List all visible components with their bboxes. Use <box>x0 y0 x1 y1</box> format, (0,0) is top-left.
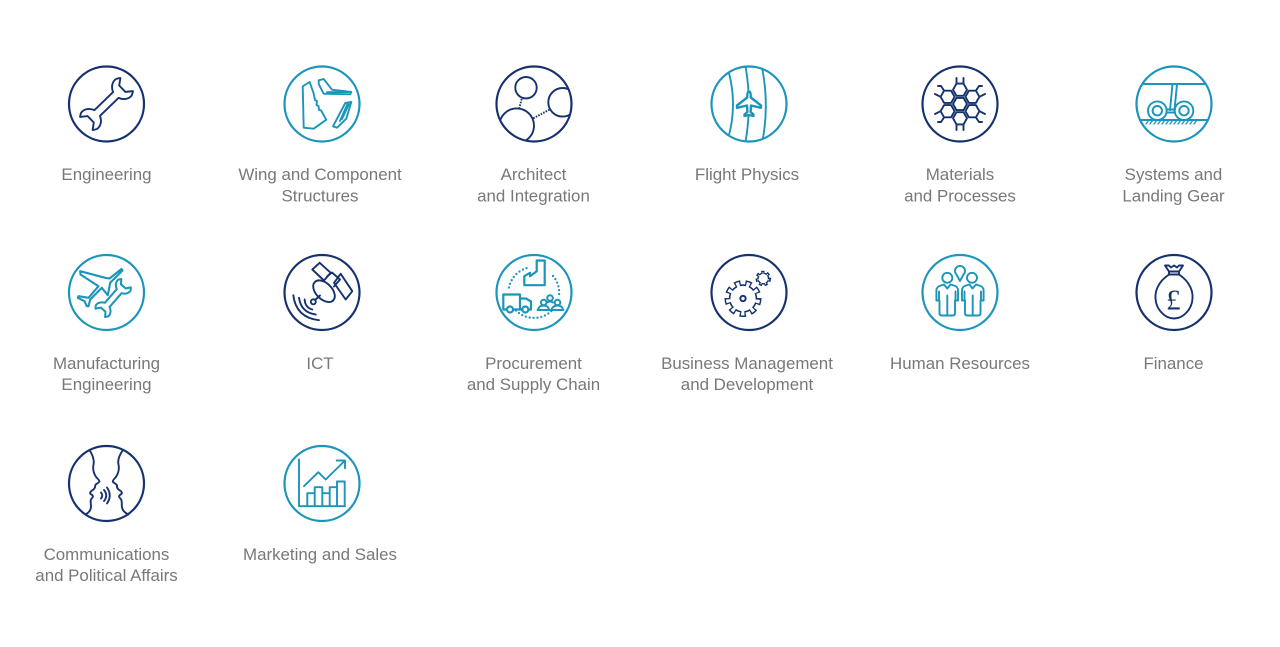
icon: people (Human Resources) <box>922 255 998 330</box>
icon: growth chart (Marketing and Sales) <box>284 446 360 521</box>
label: Procurement and Supply Chain: and Supply Chain <box>467 375 600 394</box>
label: Wing and Component Structures: Structures <box>282 186 358 206</box>
icon: factory, truck and people (Procurement and Supply Chain) <box>496 255 572 330</box>
label: Business Management and Development: and Development <box>681 375 813 394</box>
label: Business Management and Development: Business Management <box>661 354 833 373</box>
icon: two faces talking (Communications and Political Affairs) <box>69 446 144 521</box>
label: Engineering: Engineering <box>61 165 152 184</box>
label: Finance: Finance <box>1143 354 1204 373</box>
icon: wrench (Engineering) <box>69 66 144 142</box>
pound sign: £ <box>1166 284 1181 316</box>
label: Materials and Processes: and Processes <box>904 186 1016 206</box>
label: Procurement and Supply Chain: Procurement <box>485 354 582 373</box>
label: Communications and Political Affairs: Communications <box>44 545 169 564</box>
label: Marketing and Sales: Marketing and Sales <box>243 545 397 564</box>
label: Architect and Integration: and Integration <box>477 186 590 206</box>
icon grid <box>36 65 1224 581</box>
icon: landing gear (Systems and Landing Gear) <box>1136 66 1212 142</box>
icon: gears (Business Management and Development) <box>712 255 786 330</box>
label: Systems and Landing Gear: Systems and <box>1125 165 1222 184</box>
label: Communications and Political Affairs: and Political Affairs <box>35 566 178 585</box>
label: ICT: ICT <box>306 354 334 373</box>
label: Wing and Component Structures: Wing and Component <box>238 165 402 184</box>
icon: money bag (Finance) <box>1136 255 1212 330</box>
icon: connected circles (Architect and Integration) <box>496 66 577 143</box>
label: Flight Physics: Flight Physics <box>695 165 799 184</box>
label: Manufacturing Engineering: Engineering <box>61 375 152 394</box>
icon: wing and component parts <box>284 66 360 142</box>
label: Manufacturing Engineering: Manufacturing <box>53 354 160 373</box>
label: Architect and Integration: Architect <box>501 165 566 184</box>
icon: satellite (ICT) <box>284 255 360 330</box>
icon: plane and wrench (Manufacturing Engineering) <box>69 255 144 330</box>
label: Human Resources: Human Resources <box>890 354 1030 373</box>
icon: plane over airflow lines (Flight Physics) <box>712 66 786 142</box>
label: Systems and Landing Gear: Landing Gear <box>1122 186 1225 206</box>
label: Materials and Processes: Materials <box>926 165 994 184</box>
icon: honeycomb (Materials and Processes) <box>922 66 998 142</box>
